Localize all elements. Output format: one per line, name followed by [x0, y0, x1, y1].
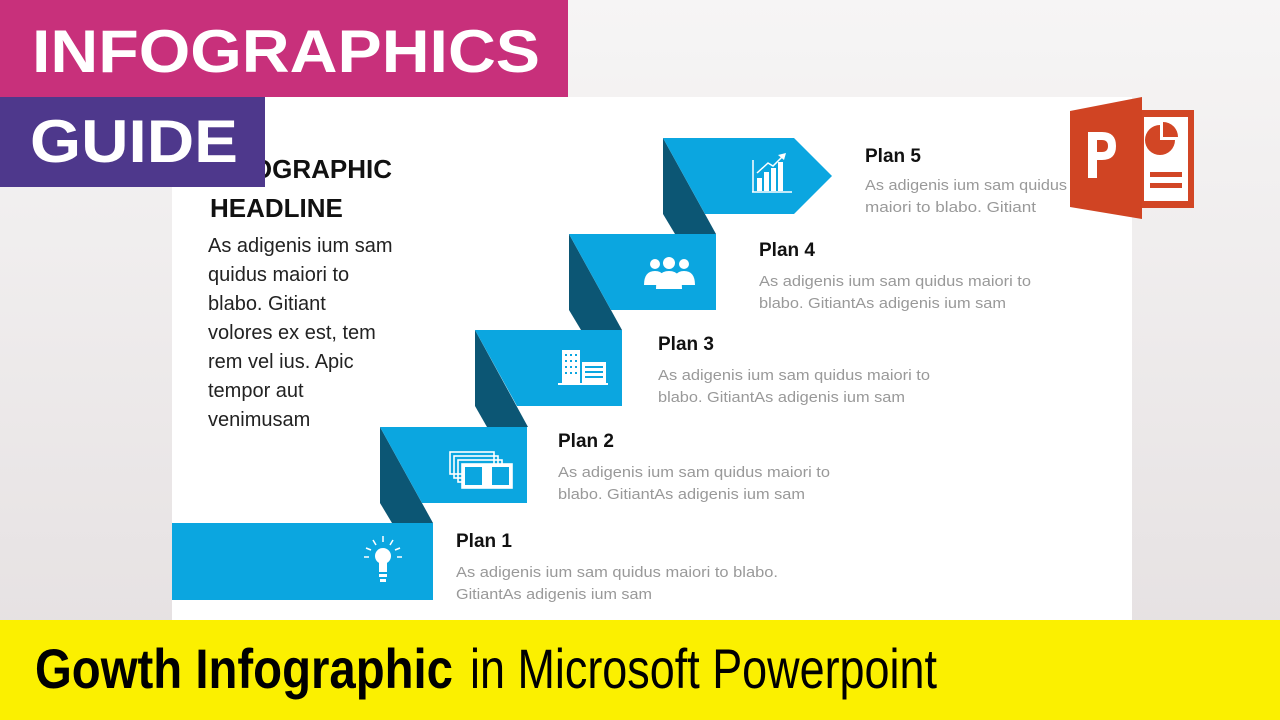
- plan 3 text: As adigenis ium sam quidus maiori to: [658, 367, 930, 384]
- icon: growth chart: [752, 153, 792, 192]
- plan 1 text: [456, 531, 778, 603]
- headline: INFOGRAPHIC: [210, 154, 392, 184]
- body text: venimusam: [208, 409, 310, 431]
- step 2: [380, 427, 527, 523]
- title banner: GUIDE: GUIDE: [30, 108, 238, 175]
- plan 2 text: Plan 2: [558, 431, 614, 452]
- step 4: [569, 234, 716, 330]
- body text: [208, 235, 393, 431]
- plan 5 text: Plan 5: [865, 146, 921, 167]
- body text: rem vel ius. Apic: [208, 351, 354, 373]
- plan 2 text: blabo. GitiantAs adigenis ium sam: [558, 486, 805, 503]
- bottom caption bar: Gowth Infographic: [35, 637, 453, 700]
- step 1: [172, 523, 433, 600]
- icon: people: [644, 257, 695, 289]
- plan 4 text: Plan 4: [759, 240, 815, 261]
- title banner: GUIDE: [0, 97, 265, 187]
- icon: money stack: [450, 452, 512, 488]
- bottom caption bar: in Microsoft Powerpoint: [470, 637, 937, 700]
- step 5: [663, 138, 832, 234]
- slide panel: [172, 97, 1132, 620]
- body text: tempor aut: [208, 380, 304, 402]
- plan 5 text: [865, 146, 1067, 216]
- body text: volores ex est, tem: [208, 322, 376, 344]
- plan 1 text: As adigenis ium sam quidus maiori to blabo.: [456, 564, 778, 581]
- title banner: INFOGRAPHICS: INFOGRAPHICS: [32, 18, 540, 85]
- body text: quidus maiori to: [208, 264, 349, 286]
- body text: blabo. Gitiant: [208, 293, 326, 315]
- plan 2 text: [558, 431, 830, 503]
- plan 1 text: Plan 1: [456, 531, 512, 552]
- body text: As adigenis ium sam: [208, 235, 393, 257]
- icon: powerpoint logo: [1070, 97, 1194, 219]
- icon: buildings: [558, 350, 608, 385]
- plan 5 text: maiori to blabo. Gitiant: [865, 199, 1037, 216]
- plan 3 text: Plan 3: [658, 334, 714, 355]
- step 3: [475, 330, 622, 427]
- plan 2 text: As adigenis ium sam quidus maiori to: [558, 464, 830, 481]
- icon: lightbulb: [364, 536, 402, 582]
- plan 4 text: [759, 240, 1031, 312]
- plan 4 text: As adigenis ium sam quidus maiori to: [759, 273, 1031, 290]
- plan 5 text: As adigenis ium sam quidus: [865, 177, 1067, 194]
- plan 1 text: GitiantAs adigenis ium sam: [456, 586, 652, 603]
- plan 3 text: [658, 334, 930, 406]
- bottom caption bar: [0, 620, 1280, 720]
- title banner: INFOGRAPHICS: [0, 0, 568, 97]
- headline: HEADLINE: [210, 193, 343, 223]
- headline: [210, 154, 392, 223]
- plan 3 text: blabo. GitiantAs adigenis ium sam: [658, 389, 905, 406]
- plan 4 text: blabo. GitiantAs adigenis ium sam: [759, 295, 1006, 312]
